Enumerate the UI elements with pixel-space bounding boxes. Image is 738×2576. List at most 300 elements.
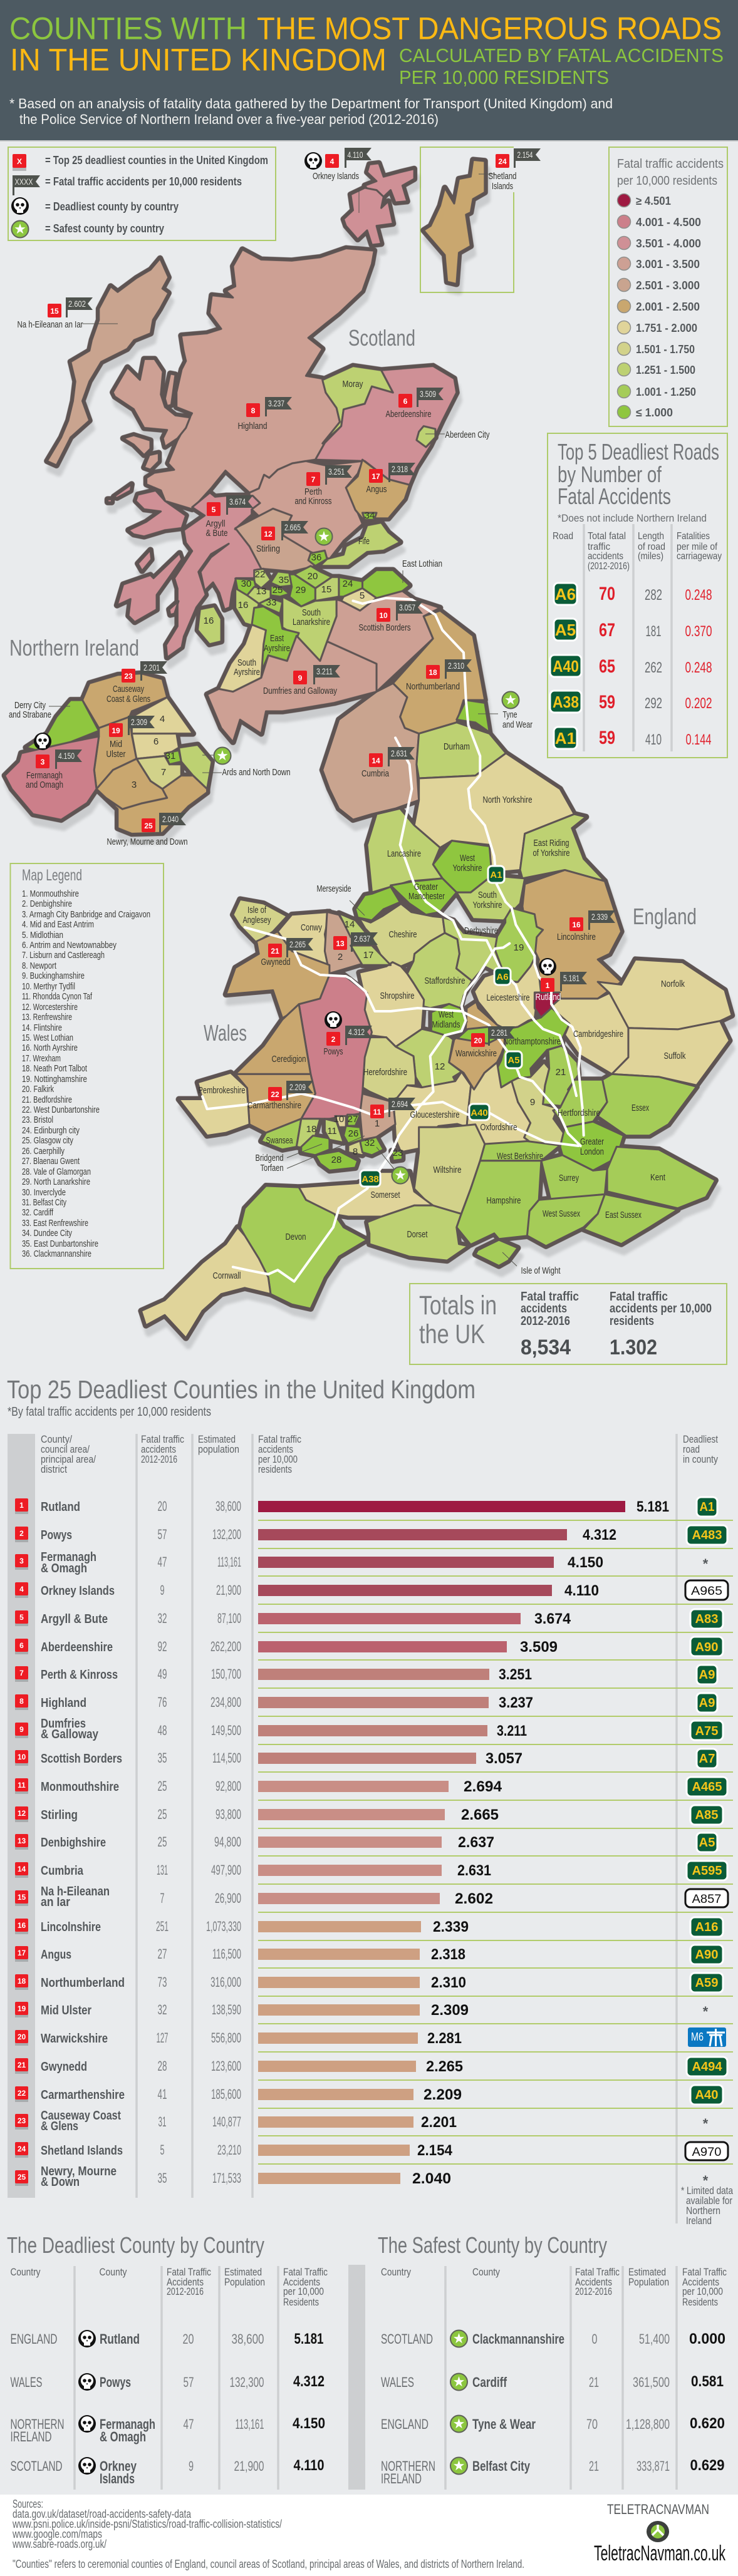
panel: top 5 deadliest roads: 262	[645, 659, 662, 676]
row 17: Angus: Angus	[41, 1948, 71, 1962]
row 3: Fermanagh and Omagh: *	[703, 1556, 709, 1572]
legend: fatal traffic accidents colour scale: 1.001 - 1.250	[636, 386, 696, 398]
title: IN THE UNITED KINGDOM	[10, 43, 387, 78]
heading: deadliest county by country: The Deadliest County by Country	[7, 2232, 264, 2258]
row 13: Denbighshire: 25	[158, 1834, 167, 1850]
road: A38 midlands	[392, 944, 509, 1152]
map leader lines	[49, 174, 517, 1266]
road: A40 midlands	[412, 1102, 578, 1146]
table column headers: accidents	[258, 1443, 293, 1455]
row 6: Aberdeenshire: 262,200	[210, 1639, 241, 1654]
county labels: Powys	[323, 1046, 343, 1057]
panel: top 5 deadliest roads: 0.248	[685, 659, 712, 676]
row 18: Northumberland: 2.310	[431, 1974, 466, 1991]
county labels: Mid	[110, 739, 122, 750]
county labels: Lancashire	[387, 848, 421, 859]
county labels: Oxfordshire	[480, 1122, 517, 1133]
panel: map legend: 6. Antrim and Newtownabbey	[22, 940, 117, 951]
flag: Aberdeenshire	[398, 388, 444, 408]
row 1: Rutland: 1	[19, 1501, 24, 1510]
county labels: and Omagh	[26, 780, 63, 790]
table column headers: 2012-2016	[141, 1453, 177, 1465]
county labels: Newry, Mourne and Down	[107, 837, 188, 847]
row 23: Causeway Coast and Glens: & Glens	[41, 2120, 78, 2133]
panel: top 5 deadliest roads: 282	[645, 587, 662, 604]
flag: Newry, Mourne and Down: 25	[144, 822, 153, 830]
road: A40 west	[202, 1094, 412, 1115]
road: A1 north	[353, 598, 506, 902]
county labels: Cumbria	[361, 768, 390, 779]
numbered county keys on map: 31	[165, 751, 175, 761]
legend: fatal traffic accidents colour scale: Fatal traffic accidents	[617, 157, 724, 171]
flag: Highland: 8	[251, 406, 256, 415]
flag: Gwynedd	[268, 938, 313, 957]
flag: Carmarthenshire: 2.209	[289, 1082, 306, 1092]
flag: Shetland Islands: 24	[498, 157, 507, 166]
county labels: Ayrshire	[264, 643, 290, 654]
Wales principal areas	[179, 899, 395, 1170]
table column headers: population	[198, 1443, 239, 1455]
numbered county keys on map: 5	[360, 590, 365, 601]
row 3: Fermanagh and Omagh: 47	[158, 1554, 167, 1570]
row 20: Warwickshire: 556,800	[211, 2030, 241, 2046]
county labels: Causeway	[113, 684, 144, 694]
flag: Perth and Kinross	[306, 465, 352, 486]
table: deadliest county by country: Accidents	[283, 2276, 320, 2288]
row 11: Monmouthshire: 11	[18, 1781, 26, 1790]
row 12: Stirling: 12	[18, 1809, 26, 1818]
flag: Mid Ulster: 19	[112, 726, 120, 735]
row: Scotland: 4.110	[293, 2457, 325, 2474]
row 17: Angus: 27	[158, 1946, 167, 1962]
row 4: Orkney Islands: Orkney Islands	[41, 1584, 115, 1598]
road rows: A1	[555, 729, 576, 748]
row 24: Shetland Islands: Shetland Islands	[41, 2144, 123, 2158]
county labels: Aberdeen City	[445, 430, 490, 440]
row 20: Warwickshire: 2.281	[427, 2030, 462, 2047]
map underlay with coastline and shadow	[5, 160, 732, 1338]
row 9: Dumfries and Galloway: Dumfries	[41, 1717, 86, 1731]
road signs on map: A1	[490, 870, 502, 880]
panel: map legend: 28. Vale of Glamorgan	[22, 1167, 91, 1177]
row 24: Shetland Islands: 23,210	[217, 2142, 241, 2158]
row: Scotland: 0	[591, 2331, 598, 2347]
logo: Teletrac Navman: TELETRACNAVMAN	[607, 2501, 709, 2517]
row 19: Mid Ulster: 32	[158, 2002, 167, 2017]
road: A6 north	[395, 738, 426, 902]
flag: Cumbria: 14	[372, 756, 380, 765]
panel: map legend: 34. Dundee City	[22, 1228, 72, 1239]
county labels: Devon	[286, 1232, 306, 1242]
row 21: Gwynedd: 21	[18, 2061, 26, 2069]
subtitle	[399, 44, 724, 88]
county labels: Pembrokeshire	[198, 1085, 246, 1096]
county labels: South	[302, 607, 321, 618]
row 21: Gwynedd: 28	[158, 2058, 167, 2074]
row 25: Newry, Mourne and Down: 25	[18, 2173, 26, 2182]
row 24: Shetland Islands: 2.154	[417, 2142, 453, 2159]
row: Wales: 132,300	[229, 2374, 264, 2390]
row: England: Tyne & Wear	[472, 2416, 536, 2432]
table: deadliest county by country: Residents	[283, 2296, 319, 2308]
row 18: Northumberland: 73	[158, 1974, 167, 1990]
row 9: Dumfries and Galloway: 3.211	[497, 1723, 527, 1739]
row 8: Highland: 234,800	[210, 1694, 241, 1710]
panel: totals in the UK	[410, 1284, 727, 1364]
flag: Scottish Borders: 3.057	[399, 602, 415, 612]
table: safest county by country: Population	[628, 2276, 669, 2288]
row: Wales: Powys	[100, 2374, 131, 2390]
flag: Orkney Islands: 4.110	[347, 150, 363, 160]
row 10: Scottish Borders: 35	[158, 1750, 167, 1766]
county labels: Greater	[414, 882, 438, 892]
county labels: Manchester	[408, 891, 445, 902]
flag: Lincolnshire	[569, 910, 615, 931]
flag: Cumbria	[369, 747, 415, 767]
row: Scotland: SCOTLAND	[10, 2458, 63, 2474]
panel: top 5 deadliest roads: 59	[599, 692, 615, 713]
flag: Rutland: 5.181	[563, 973, 579, 983]
row 4: Orkney Islands: A965	[691, 1585, 722, 1598]
county labels: Conwy	[301, 922, 322, 933]
panel: top 5 deadliest roads	[548, 433, 727, 758]
row 12: Stirling	[15, 1805, 723, 1825]
county labels: Aberdeenshire	[386, 409, 431, 420]
numbered county keys on map: 18	[306, 1124, 316, 1135]
England counties	[141, 683, 732, 1338]
road: A5 midlands	[351, 979, 581, 1146]
row 14: Cumbria: 497,900	[211, 1862, 241, 1878]
row 11: Monmouthshire: A465	[692, 1780, 722, 1794]
numbered county keys on map: 28	[331, 1155, 341, 1165]
note: limited data: Northern	[686, 2205, 720, 2217]
flag: Orkney Islands	[304, 148, 372, 170]
row 7: Perth and Kinross: 150,700	[211, 1666, 241, 1682]
row 8: Highland: A9	[699, 1696, 715, 1710]
row: Wales	[10, 2373, 325, 2391]
row 7: Perth and Kinross: Perth & Kinross	[41, 1668, 118, 1682]
row 9: Dumfries and Galloway: A75	[695, 1724, 718, 1738]
county labels: East	[270, 633, 284, 644]
flag: Angus: 2.318	[392, 464, 408, 474]
row 11: Monmouthshire: 25	[158, 1778, 167, 1794]
table: safest county by country: Accidents	[575, 2276, 612, 2288]
column headers	[553, 531, 722, 572]
flag: Angus: 17	[372, 472, 380, 481]
numbered county keys on map: 6	[153, 736, 159, 747]
table: safest county by country: Estimated	[628, 2266, 666, 2278]
panel: totals in the UK: Totals in	[419, 1291, 497, 1321]
flag: Gwynedd: 2.265	[289, 939, 306, 949]
heading: by Number of	[558, 461, 662, 487]
row 5: Argyll and Bute: Argyll & Bute	[41, 1612, 108, 1626]
county labels: East Sussex	[605, 1210, 642, 1220]
flag: Powys: 2	[331, 1035, 336, 1044]
flag: Powys: 4.312	[348, 1027, 365, 1037]
county labels: Coast & Glens	[107, 694, 150, 704]
logo: Teletrac Navman	[594, 2501, 726, 2565]
column headers: Fatalities	[677, 531, 710, 542]
heading: top 25 deadliest counties: Top 25 Deadliest Counties in the United Kingdom	[7, 1375, 476, 1404]
row 22: Carmarthenshire: A40	[695, 2088, 718, 2102]
flag: Warwickshire: 20	[474, 1036, 482, 1045]
flag: Northumberland: 18	[429, 668, 437, 677]
title	[9, 11, 722, 78]
table: safest county by country: per 10,000	[682, 2285, 723, 2297]
table column headers: Estimated	[198, 1433, 236, 1445]
row: Northern Ireland: NORTHERN	[10, 2416, 64, 2432]
table column headers: district	[41, 1463, 67, 1475]
row: Scotland: Orkney	[100, 2458, 137, 2474]
sources: www.sabre-roads.org.uk/	[12, 2538, 107, 2550]
numbered county keys on map: 3	[132, 780, 137, 790]
panel: map legend: 13. Renfrewshire	[22, 1012, 72, 1023]
west coast islands and Argyll, drawn in detail coordinates	[108, 359, 268, 657]
row 7: Perth and Kinross: 49	[158, 1666, 167, 1682]
table column headers: residents	[258, 1463, 292, 1475]
county labels: Stirling	[256, 544, 280, 554]
county labels: Northumberland	[406, 681, 460, 692]
flag: Argyll and Bute: 5	[212, 505, 216, 514]
row 20: Warwickshire: M6	[691, 2031, 704, 2043]
row: Northern Ireland: IRELAND	[10, 2429, 51, 2445]
row 10: Scottish Borders: A7	[699, 1752, 715, 1766]
panel: map legend: 1. Monmouthshire	[22, 889, 79, 899]
legend: fatal traffic accidents colour scale	[609, 147, 727, 426]
heading: Fatal Accidents	[558, 483, 671, 509]
county labels: Isle of	[247, 905, 267, 915]
table: deadliest county by country: County	[99, 2266, 127, 2278]
row: Wales: WALES	[10, 2374, 43, 2390]
row 2: Powys: 132,200	[212, 1527, 241, 1542]
row 22: Carmarthenshire: 22	[18, 2089, 26, 2098]
table column headers: County/	[41, 1433, 72, 1445]
column headers: Total fatal	[588, 531, 626, 542]
county labels: Cheshire	[388, 929, 417, 940]
row: England	[381, 2415, 725, 2432]
row: England: 38,600	[232, 2331, 264, 2347]
row: Northern Ireland: Belfast City	[472, 2458, 531, 2474]
row 11: Monmouthshire: 92,800	[216, 1778, 241, 1794]
numbered county keys on map: 23	[393, 1148, 403, 1158]
row 3: Fermanagh and Omagh: & Omagh	[41, 1562, 87, 1575]
heading: safest county by country: The Safest County by Country	[378, 2232, 607, 2258]
panel: map legend: 3. Armagh City Banbridge and Craigavon	[22, 909, 150, 920]
row 11: Monmouthshire	[15, 1777, 727, 1796]
road rows: A40	[553, 657, 579, 676]
panel: totals in the UK: Fatal traffic	[610, 1290, 668, 1304]
column headers: (2012-2016)	[588, 561, 630, 572]
county labels: West Berkshire	[497, 1151, 543, 1162]
row: Northern Ireland: Fermanagh	[100, 2416, 155, 2432]
row 16: Lincolnshire	[15, 1917, 723, 1937]
county labels: Dumfries and Galloway	[263, 686, 337, 696]
flag: Warwickshire	[471, 1026, 515, 1047]
county labels: East Riding	[534, 838, 569, 848]
county labels: Na h-Eileanan an Iar	[18, 319, 83, 330]
panel: map legend: 35. East Dunbartonshire	[22, 1239, 98, 1249]
county labels: East Lothian	[402, 559, 442, 569]
row 18: Northumberland: A59	[695, 1976, 718, 1990]
row 15: Na h-Eileanan an Iar: Na h-Eileanan	[41, 1885, 110, 1899]
row 6: Aberdeenshire: Aberdeenshire	[41, 1641, 113, 1654]
county labels: Rutland	[535, 992, 561, 1002]
row 4: Orkney Islands: 21,900	[216, 1582, 241, 1598]
county labels: Hertfordshire	[558, 1108, 600, 1118]
row 6: Aberdeenshire	[15, 1637, 723, 1656]
centre divider	[348, 2265, 365, 2490]
numbered county keys on map: 24	[343, 579, 353, 589]
legend: fatal traffic accidents colour scale: per 10,000 residents	[617, 174, 717, 188]
table column headers: principal area/	[41, 1453, 96, 1465]
county labels: and Strabane	[9, 709, 51, 720]
column headers: per mile of	[677, 542, 717, 552]
panel: top 5 deadliest roads: 181	[645, 623, 662, 640]
row 4: Orkney Islands: 4.110	[564, 1582, 599, 1599]
flag: Newry, Mourne and Down	[142, 813, 186, 832]
white road lines	[202, 598, 584, 1282]
flag: Na h-Eileanan an Iar: 15	[50, 307, 59, 316]
panel: totals in the UK: accidents	[521, 1302, 567, 1316]
row dividers	[258, 1520, 733, 2164]
county labels: Argyll	[205, 518, 226, 529]
row 13: Denbighshire: A5	[699, 1836, 715, 1850]
map key panel: = Fatal traffic accidents per 10,000 residents	[45, 175, 242, 188]
map rank badges and value flags	[34, 148, 615, 1118]
county labels: Cornwall	[213, 1270, 241, 1281]
flag: Dumfries and Galloway	[293, 665, 340, 684]
row: Northern Ireland: 4.150	[293, 2415, 325, 2432]
map key panel: = Top 25 deadliest counties in the United Kingdom	[45, 154, 268, 167]
numbered county keys on map: 27	[348, 1114, 358, 1125]
county labels: Surrey	[559, 1173, 579, 1183]
panel: totals in the UK: Fatal traffic	[521, 1290, 579, 1304]
row 25: Newry, Mourne and Down	[15, 2165, 709, 2189]
county labels: Fife	[358, 536, 370, 547]
note: limited data: Ireland	[686, 2215, 712, 2227]
row 5: Argyll and Bute: A83	[695, 1612, 718, 1626]
panel: map legend: 30. Inverclyde	[22, 1187, 66, 1198]
panel: map legend: 32. Cardiff	[22, 1207, 54, 1218]
header panel	[0, 0, 738, 142]
numbered county keys on map: 11	[327, 1126, 337, 1136]
row 9: Dumfries and Galloway: 149,500	[211, 1723, 241, 1738]
row 14: Cumbria	[15, 1861, 727, 1880]
flag: Northumberland	[426, 659, 472, 679]
row: Scotland	[10, 2457, 325, 2486]
county labels: Perth	[304, 487, 322, 497]
numbered county keys on map: 13	[256, 586, 266, 597]
row 18: Northumberland: Northumberland	[41, 1976, 125, 1990]
county labels: and Kinross	[294, 496, 332, 507]
numbered county keys on map: 19	[514, 942, 524, 953]
row 24: Shetland Islands: A970	[692, 2146, 722, 2159]
row: Scotland: Clackmannanshire	[472, 2331, 564, 2347]
flag: Highland: 3.237	[268, 398, 284, 408]
row: Scotland: SCOTLAND	[381, 2331, 433, 2347]
county labels: Norfolk	[661, 979, 685, 989]
row 15: Na h-Eileanan an Iar: 7	[160, 1890, 164, 1906]
row 12: Stirling: 93,800	[216, 1806, 241, 1822]
panel: top 5 deadliest roads: 292	[645, 695, 662, 712]
row 20: Warwickshire: Warwickshire	[41, 2032, 108, 2046]
row 7: Perth and Kinross: 3.251	[499, 1666, 532, 1683]
panel: top 5 deadliest roads: 59	[599, 728, 615, 748]
row 25: Newry, Mourne and Down: 35	[158, 2170, 167, 2186]
row: Northern Ireland: 113,161	[236, 2416, 264, 2432]
flag: Powys	[326, 1026, 372, 1046]
flag: Newry, Mourne and Down: 2.040	[162, 814, 179, 824]
row 15: Na h-Eileanan an Iar: 26,900	[215, 1890, 241, 1906]
row: Scotland: 0.000	[689, 2331, 725, 2347]
panel: map legend: 36. Clackmannanshire	[22, 1249, 91, 1259]
sources	[12, 2498, 282, 2550]
county labels: Durham	[444, 741, 470, 752]
row 14: Cumbria: Cumbria	[41, 1864, 84, 1878]
row 6: Aberdeenshire: A90	[695, 1641, 718, 1654]
row 19: Mid Ulster: *	[703, 2004, 709, 2019]
legend: fatal traffic accidents colour scale: 4.001 - 4.500	[636, 216, 701, 229]
row 22: Carmarthenshire: Carmarthenshire	[41, 2088, 125, 2102]
flag: Stirling: 2.665	[284, 522, 301, 532]
row 15: Na h-Eileanan an Iar: 2.602	[455, 1890, 493, 1907]
county labels: South	[237, 657, 256, 668]
flag: Argyll and Bute: 3.674	[229, 497, 246, 507]
county labels: Greater	[580, 1136, 604, 1147]
panel: top 5 deadliest roads: 0.144	[685, 731, 712, 748]
numbered county keys on map: 15	[321, 584, 331, 595]
row 3: Fermanagh and Omagh: Fermanagh	[41, 1550, 96, 1564]
panel: map legend: 31. Belfast City	[22, 1197, 66, 1208]
table: safest county by country: Fatal Traffic	[575, 2266, 620, 2278]
county labels: Yorkshire	[472, 900, 502, 910]
column headers: of road	[638, 542, 665, 552]
row: England: Rutland	[100, 2331, 140, 2347]
row 19: Mid Ulster	[15, 2002, 709, 2019]
Shetland inset frame	[420, 147, 514, 292]
methodology note	[9, 96, 613, 127]
row 3: Fermanagh and Omagh	[15, 1550, 709, 1575]
county labels: & Bute	[205, 528, 228, 538]
panel: map legend: Map Legend	[22, 867, 82, 884]
road: A6 south	[426, 902, 576, 1096]
row 21: Gwynedd: 2.265	[426, 2058, 463, 2075]
panel: top 5 deadliest roads: 410	[645, 731, 662, 748]
flag: Perth and Kinross: 7	[311, 475, 316, 484]
Midlands road sections, drawn in detail coordinates	[351, 902, 584, 1152]
flag: Stirling: 12	[264, 530, 273, 538]
row 1: Rutland: Rutland	[41, 1500, 80, 1514]
flag: Monmouthshire	[370, 1098, 415, 1118]
row: Northern Ireland: IRELAND	[381, 2471, 422, 2486]
table column headers: Deadliest	[683, 1433, 718, 1445]
road signs on map: A40	[470, 1108, 488, 1118]
row 23: Causeway Coast and Glens: 23	[18, 2116, 26, 2125]
county labels: Bridgend	[256, 1153, 283, 1163]
row 23: Causeway Coast and Glens: 31	[158, 2114, 167, 2130]
row 13: Denbighshire: 2.637	[458, 1834, 494, 1851]
panel: map legend: 12. Worcestershire	[22, 1002, 78, 1012]
row 8: Highland: Highland	[41, 1696, 86, 1710]
county labels: Yorkshire	[452, 863, 482, 873]
county labels: Derry City	[14, 700, 46, 711]
row 15: Na h-Eileanan an Iar: A857	[692, 1893, 722, 1906]
numbered county keys on map: 17	[363, 950, 373, 961]
row 24: Shetland Islands	[15, 2142, 728, 2160]
table column headers: per 10,000	[258, 1453, 298, 1465]
row 23: Causeway Coast and Glens: 140,877	[212, 2114, 241, 2130]
table column headers: in county	[683, 1453, 718, 1465]
